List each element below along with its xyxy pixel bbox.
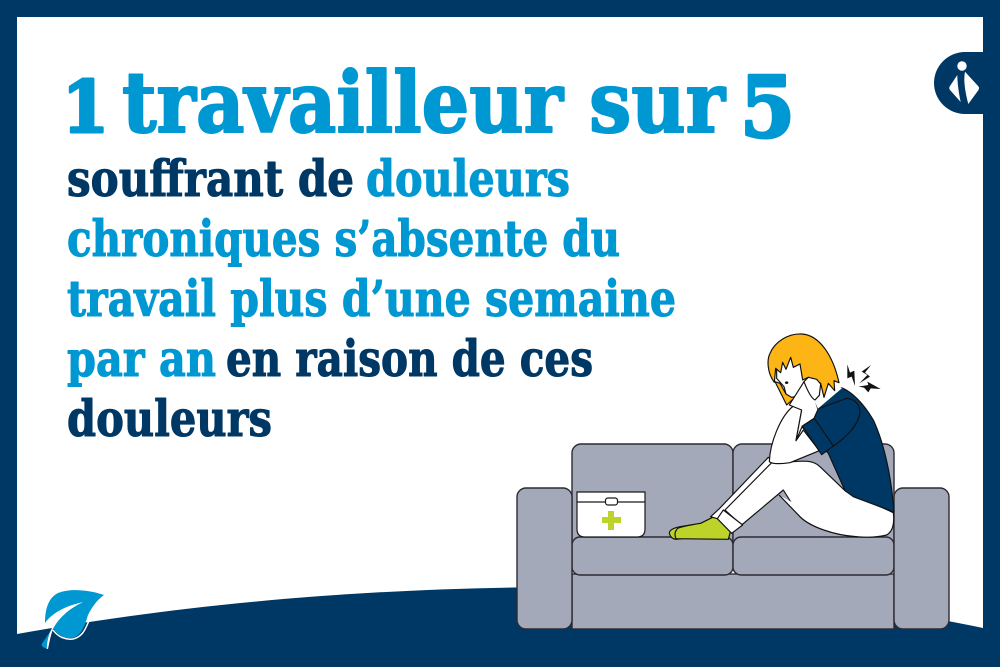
illustration: person in pain sitting on sofa: [669, 334, 894, 539]
text block: statistic description: douleurs: [366, 149, 570, 208]
heading: 1 travailleur sur 5: 5: [740, 58, 795, 157]
far hair: [775, 382, 795, 405]
sleeve seam: [817, 398, 860, 446]
icon: first aid kit: [577, 492, 645, 537]
heading: 1 travailleur sur 5: travailleur sur: [122, 53, 727, 152]
logo: top right badge: [934, 52, 983, 114]
navy ground curve: [17, 587, 983, 650]
hand: [804, 377, 821, 400]
sleeve cuff: [802, 418, 833, 455]
neck behind shirt collar: [814, 388, 843, 409]
socks: [669, 517, 731, 539]
trousers: far leg: [711, 457, 775, 519]
text block: statistic description: chroniques s’absente du: [67, 209, 620, 268]
text block: statistic description: douleurs: [67, 389, 272, 448]
pain lightning bolts: [847, 364, 881, 392]
text block: statistic description: en raison de ces: [226, 329, 593, 388]
text block: statistic description: par an: [67, 329, 216, 388]
face: [777, 353, 808, 397]
sofa: [517, 444, 949, 629]
trouser cuff: [717, 510, 743, 533]
hair: [768, 334, 839, 397]
trouser inner stripe: [779, 495, 857, 537]
t-shirt: [802, 388, 894, 512]
logo: blue leaf: [42, 590, 104, 649]
trousers: near leg and hips: [725, 461, 894, 537]
eye: [785, 381, 788, 384]
neck and forearm: [789, 382, 818, 441]
upper arm: [769, 406, 819, 464]
heading: 1 travailleur sur 5: 1: [62, 65, 109, 149]
text block: statistic description: travail plus d’une semaine: [67, 269, 676, 328]
text block: statistic description: [67, 149, 676, 448]
text block: statistic description: souffrant de: [67, 149, 354, 208]
